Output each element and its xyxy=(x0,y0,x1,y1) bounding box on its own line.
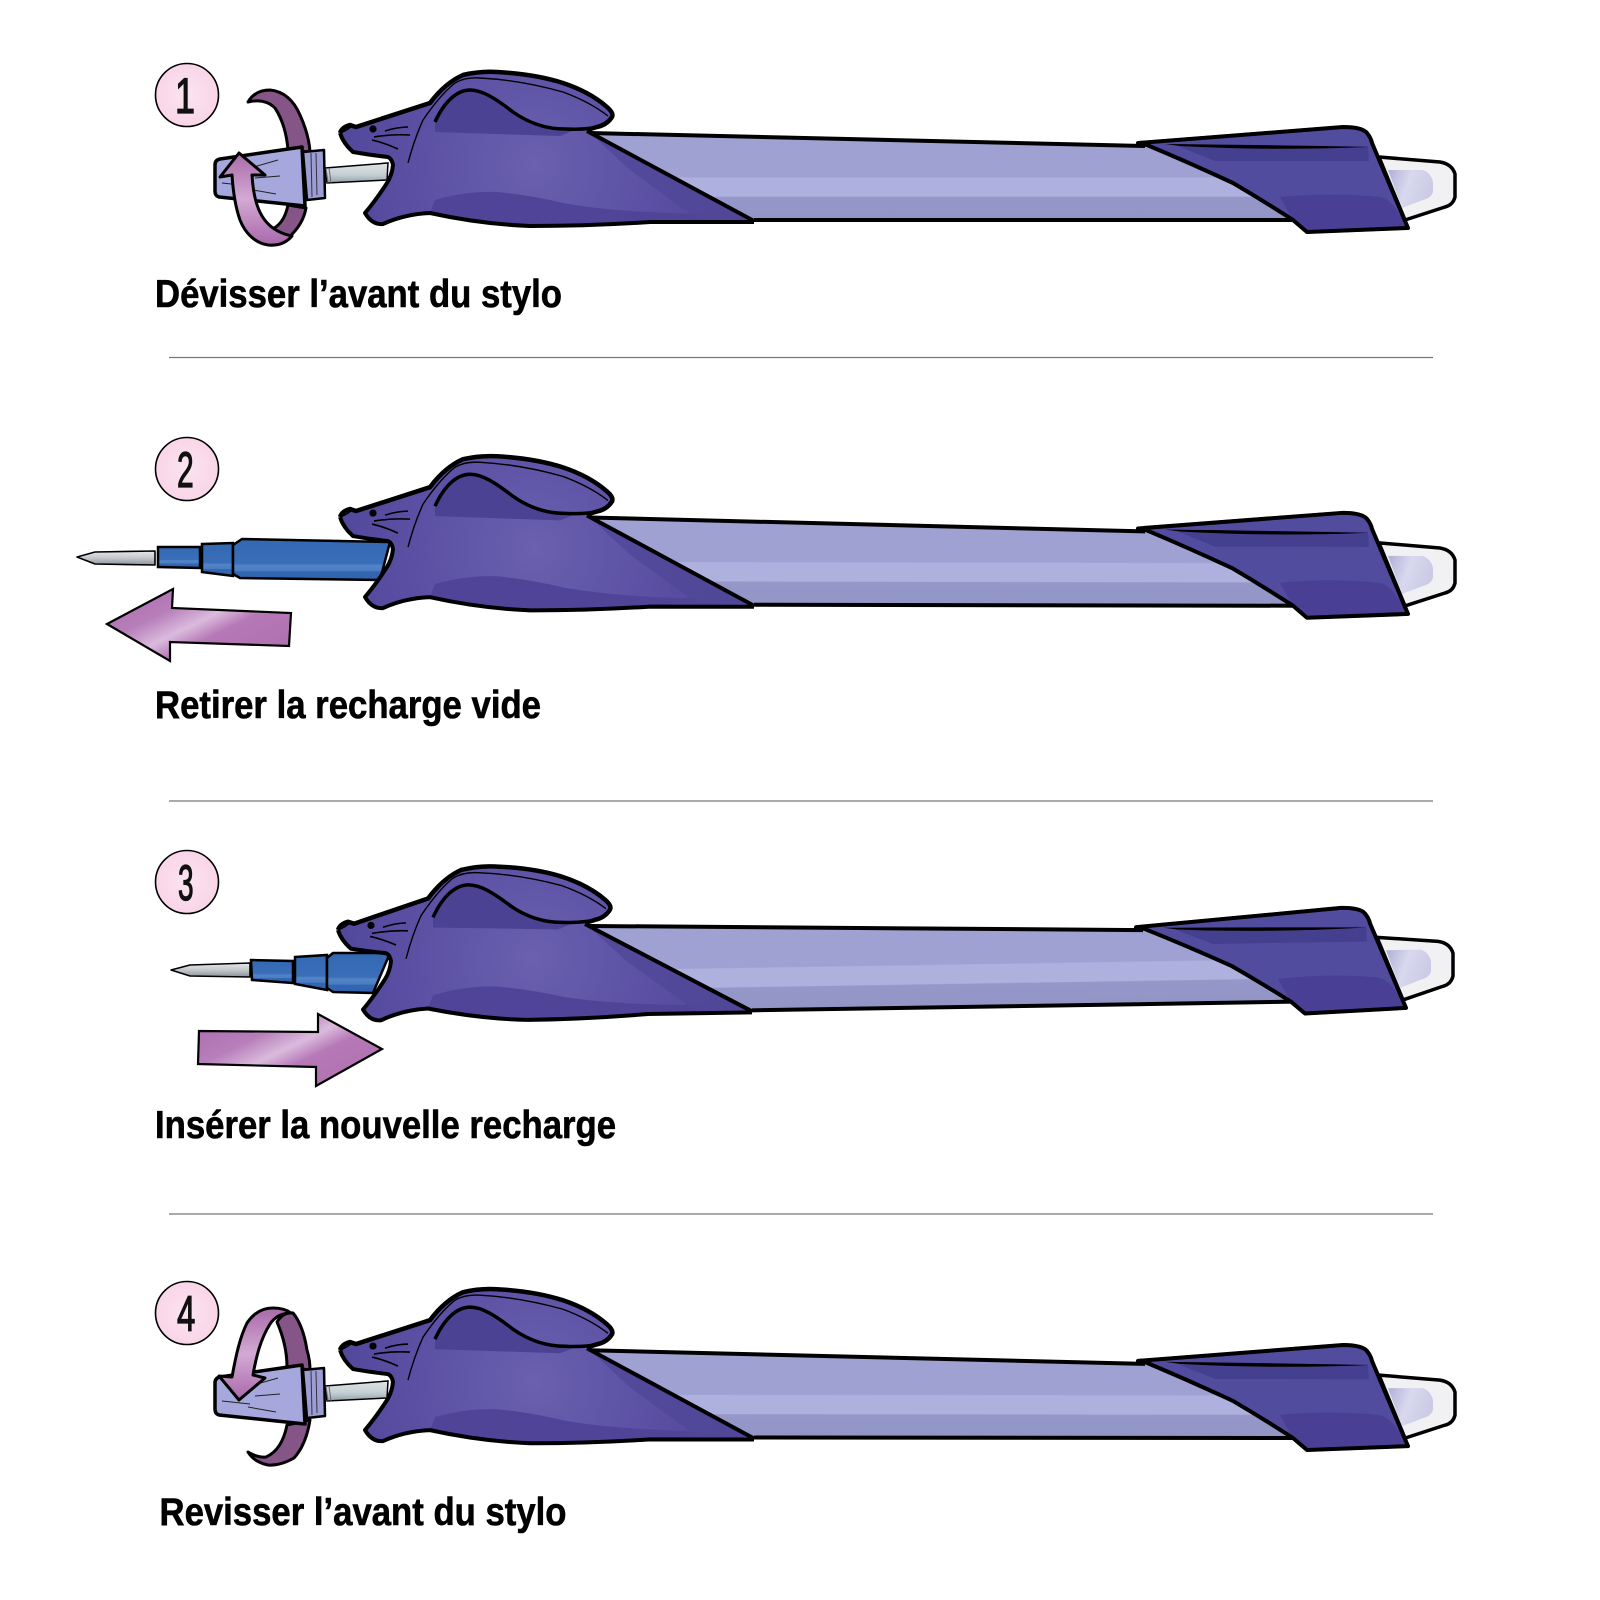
divider xyxy=(169,800,1433,802)
icon: rotation arrow back, unscrew xyxy=(248,90,310,238)
arrow: pull left xyxy=(107,589,291,661)
caption step 3: Insérer la nouvelle recharge xyxy=(155,1104,616,1147)
icon: rotation arrow front, unscrew xyxy=(220,153,292,245)
icon: rotation arrow front, screw xyxy=(219,1308,291,1400)
step 3 panel xyxy=(155,850,1453,1147)
new refill being inserted xyxy=(171,953,390,993)
pen body with mouse head xyxy=(340,456,1455,618)
caption step 4: Revisser l’avant du stylo xyxy=(160,1491,566,1534)
arrow: push right xyxy=(198,1014,382,1086)
pen body with mouse head xyxy=(340,72,1455,232)
step number badge 3: 3 xyxy=(178,854,194,911)
step 2 panel xyxy=(77,438,1455,727)
pen body with mouse head xyxy=(340,1289,1455,1450)
pen front section, detached xyxy=(215,147,388,206)
step 1 panel xyxy=(155,64,1455,316)
divider xyxy=(169,356,1433,358)
caption step 1: Dévisser l’avant du stylo xyxy=(155,273,562,316)
old refill being removed xyxy=(77,539,390,580)
step number badge 3 xyxy=(156,850,218,914)
pen front section, detached xyxy=(215,1365,388,1424)
divider xyxy=(169,1213,1433,1215)
step number badge 1 xyxy=(156,64,218,126)
caption step 2: Retirer la recharge vide xyxy=(155,684,541,727)
step number badge 1: 1 xyxy=(175,69,195,124)
icon: rotation arrow back, screw xyxy=(248,1313,310,1465)
step 4 panel xyxy=(156,1282,1455,1534)
step number badge 2: 2 xyxy=(177,442,194,498)
step number badge 2 xyxy=(156,438,218,500)
step number badge 4: 4 xyxy=(177,1286,195,1342)
step number badge 4 xyxy=(156,1282,218,1344)
pen body with mouse head xyxy=(338,851,1453,1029)
